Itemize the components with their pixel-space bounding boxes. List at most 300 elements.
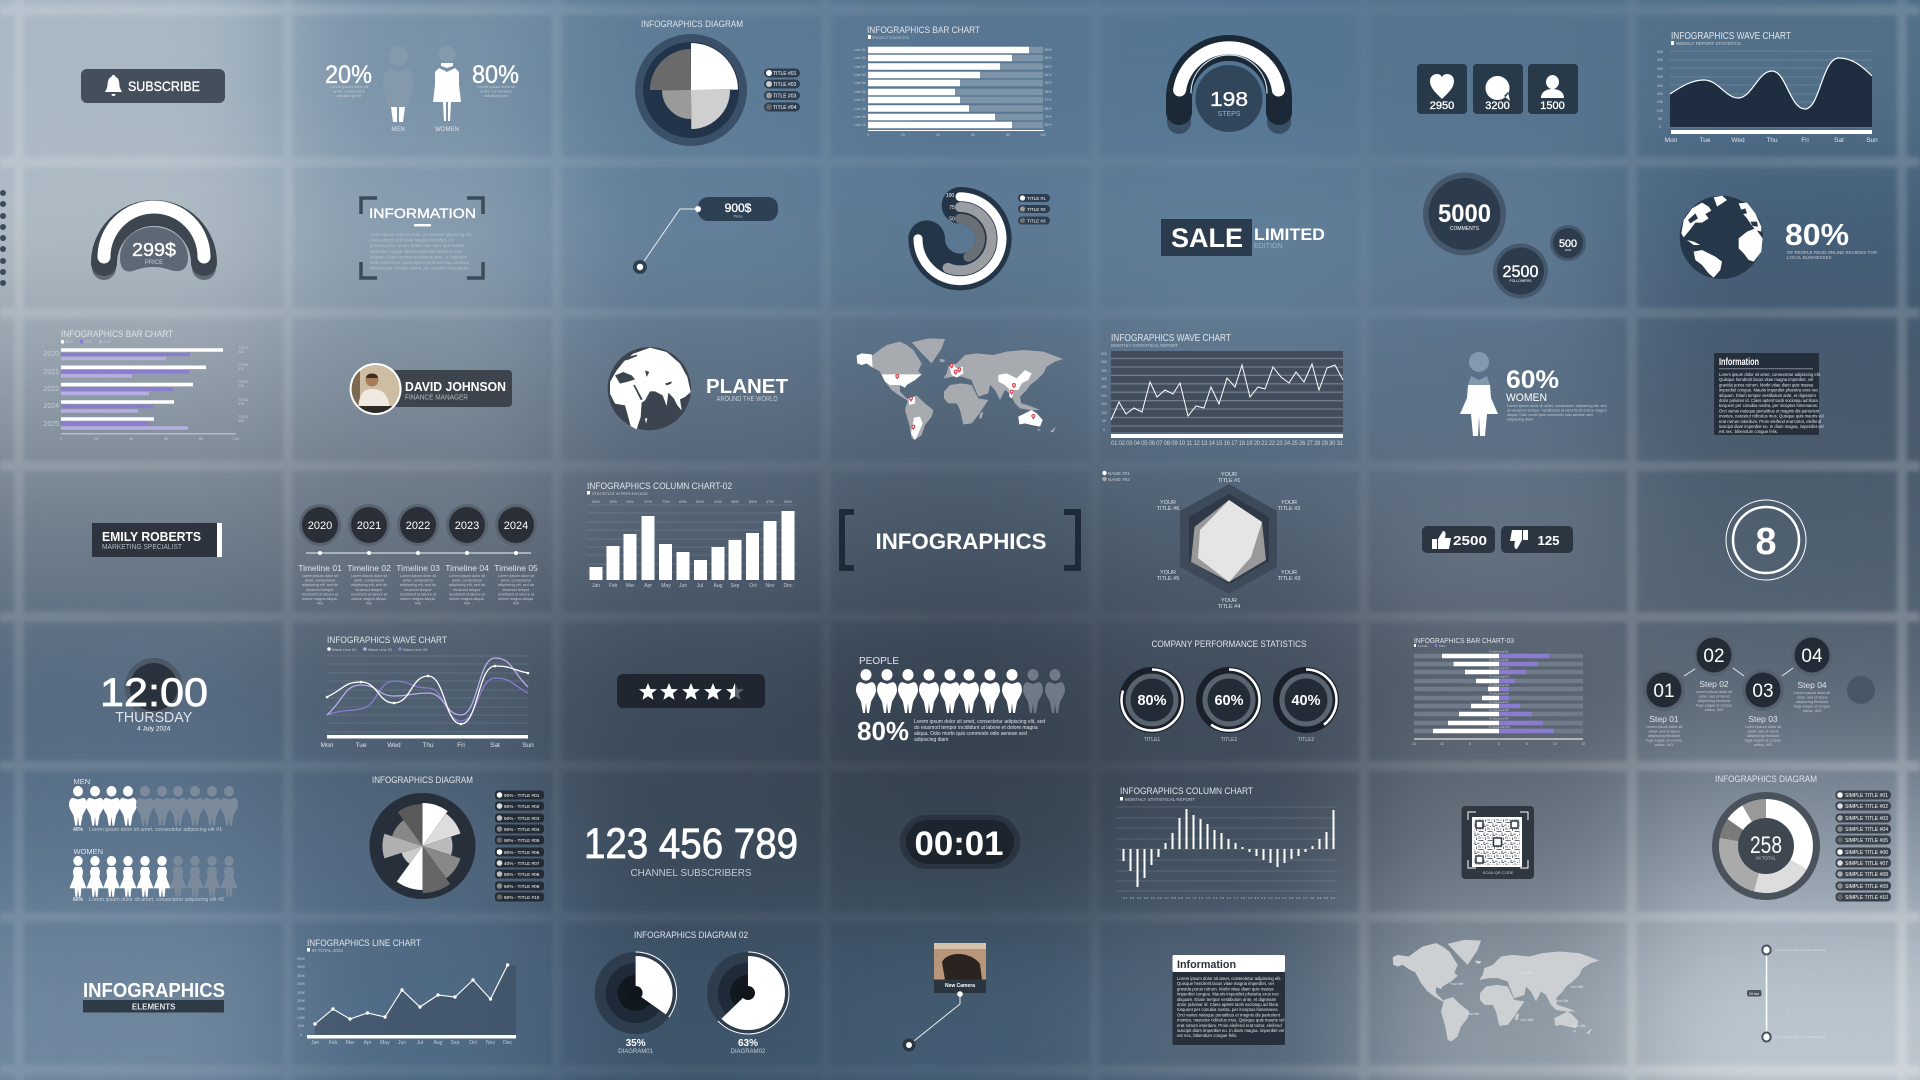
subtitle: MONTHLY STATISTICAL REPORT — [1111, 343, 1178, 348]
region labels: Your title — [1520, 1018, 1534, 1022]
value labels: 35K — [1657, 67, 1664, 71]
panel: column chart 02 — [587, 481, 797, 589]
scale labels: 100 — [946, 193, 954, 199]
axis ticks: 01 02 03 04 05 06 07 08 09 10 11 12 13 14 15 16 17 18 19 20 21 22 23 24 25 26 27 28 29 30 31 — [1123, 896, 1335, 900]
heading: INFORMATION — [369, 205, 476, 221]
value labels: 200 — [1101, 394, 1107, 398]
day labels: Sun — [522, 742, 534, 749]
tag — [92, 523, 217, 557]
axis: 10 — [1553, 742, 1557, 746]
step circle 04 — [1791, 634, 1833, 676]
body text: erat rutrum interdum. Proin eleifend erat tortor, eleifend — [1177, 1023, 1282, 1028]
labels: DIAGRAM01 — [618, 1049, 654, 1055]
heading: INFOGRAPHICS DIAGRAM — [1715, 774, 1817, 785]
caption: aliqua. Odio morbi quis commodo odio aenean sed — [1507, 413, 1593, 417]
legend: NAME #02 — [1108, 477, 1130, 482]
value labels: 300K — [297, 982, 306, 986]
legend — [764, 68, 800, 112]
totals: TOTAL — [238, 415, 249, 419]
milestone text: #02 — [366, 602, 372, 606]
card — [1714, 353, 1819, 435]
milestone text: Lorem ipsum dolor sit — [498, 574, 535, 578]
caption: OF PEOPLE READ ONLINE REVIEWS FOR — [1787, 250, 1878, 255]
step circle 01 — [1643, 669, 1685, 711]
note under 80 percent: adipiscing elit — [484, 93, 509, 98]
axis — [1412, 738, 1585, 746]
day labels: Fri — [457, 742, 465, 749]
value labels: 250 — [1101, 385, 1107, 389]
step 03 text: adipiscing tincidunt — [1747, 734, 1780, 738]
panel: timeline — [298, 504, 538, 606]
globe — [1680, 196, 1763, 279]
legend — [1102, 471, 1130, 482]
panel: emily roberts name tag — [92, 523, 222, 557]
panel: price gauge 299 — [104, 207, 204, 272]
inner ring — [1733, 507, 1799, 573]
step circle 02 — [1693, 634, 1735, 676]
scale labels — [946, 193, 955, 222]
step 04 text: adhuc, #04 — [1803, 709, 1821, 713]
body text: montes, nascetur ridiculus mus. Quisque quis mauris vel — [1177, 1018, 1285, 1023]
axis labels: TITLE #6 — [1157, 506, 1179, 512]
name: DAVID JOHNSON — [405, 379, 506, 394]
body text: suscipit diam imperdiet eu. In diam magna, imperdiet vel — [1177, 1028, 1284, 1033]
step 02 text: amet, sed ut lacus — [1699, 694, 1730, 698]
series two — [327, 658, 528, 715]
month labels: Dec — [503, 1040, 513, 1046]
corner markers — [1476, 821, 1518, 863]
labels: men, women: WOMEN — [435, 127, 459, 133]
totals: 37K — [238, 402, 245, 406]
value labels: 300 — [1101, 377, 1107, 381]
value labels: 100 — [1101, 411, 1107, 415]
heading: COMPANY PERFORMANCE STATISTICS — [1152, 639, 1306, 650]
labels: men, women: MEN — [391, 127, 405, 133]
region labels: Your title — [1555, 999, 1569, 1003]
subtitle: STATISTICS IN PERCENTAGE — [592, 491, 648, 496]
value labels: 25K — [1657, 84, 1664, 88]
month labels — [592, 583, 793, 589]
axis and labels: 54% — [1044, 73, 1052, 77]
value labels: 250K — [297, 991, 306, 995]
step 02 text: adipiscing tincidunt — [1698, 699, 1731, 703]
corner brackets — [361, 198, 483, 278]
underline — [414, 224, 431, 226]
panel: clock — [100, 658, 208, 732]
axis and labels: 0 — [867, 133, 869, 137]
axis: 40 — [129, 436, 134, 441]
faded circle — [1847, 676, 1875, 704]
percent labels: 47% — [644, 499, 652, 504]
subtitle: IN TOTAL 2023 — [312, 948, 343, 953]
month labels: Feb — [609, 583, 618, 589]
month labels: Jun — [679, 583, 687, 589]
month labels: Apr — [364, 1040, 372, 1046]
milestone titles: Timeline 03 — [396, 563, 440, 573]
legend — [1018, 194, 1050, 224]
body: imperdiet congue. Mauris imperdiet pharetra eros nec — [1719, 388, 1818, 393]
start note: Lorem ipsum dolor sit amet adipiscing — [1775, 948, 1826, 952]
caption: adipiscing diam — [914, 737, 948, 743]
caption: do eiusmod tempor. Vestibulum et lobortis sit dolore magna — [1507, 408, 1608, 412]
step 03 text: amet, sed ut lacus — [1748, 730, 1779, 734]
axis and labels: 36% — [1044, 90, 1052, 94]
caption: Lorem ipsum dolor sit amet, consectetur adipiscing elit, sed — [1507, 404, 1607, 408]
stat: 80 percent: 80% — [472, 61, 519, 89]
milestone text: amet, consectetur — [501, 579, 532, 583]
panel: globe 80 percent — [1680, 196, 1878, 279]
digits: 00:01 — [914, 825, 1004, 863]
panel: bipolar column chart — [1116, 786, 1337, 900]
axis labels: TITLE #3 — [1278, 576, 1300, 582]
panel: diagram 02 — [595, 930, 789, 1055]
series one — [327, 666, 528, 724]
button background — [81, 69, 225, 103]
axis and labels: Line 06 — [854, 90, 866, 94]
women figures — [70, 856, 238, 897]
value labels: 0 — [1659, 125, 1661, 129]
axis labels — [1157, 472, 1300, 610]
panel: follower bubbles — [1423, 172, 1586, 298]
day labels: Mon — [321, 742, 334, 749]
year labels: 2025 — [43, 421, 59, 428]
step 01 text: Lorem ipsum dolor sit — [1646, 725, 1683, 729]
region labels: Your title — [1570, 985, 1584, 989]
axis: 0 — [1498, 742, 1500, 746]
legend: SIMPLE TITLE #09 — [1845, 884, 1888, 890]
grid — [1670, 51, 1872, 127]
value labels — [1101, 352, 1107, 432]
legend: SIMPLE TITLE #05 — [1845, 838, 1888, 844]
body text: Lorem ipsum dolor sit amet, consectetur adipiscing elit. — [370, 232, 472, 237]
gauge value arc — [1180, 48, 1278, 90]
percent labels: 43% — [714, 499, 722, 504]
map — [1393, 940, 1599, 1041]
year labels: 2021 — [43, 369, 59, 376]
bubble: comments: COMMENTS — [1450, 226, 1480, 232]
axis: 5 — [1526, 742, 1528, 746]
note under 80 percent: amet, consectetur — [480, 88, 513, 94]
pill — [900, 815, 1020, 869]
bar values — [868, 50, 1029, 125]
bubble: comments: 5000 — [1438, 200, 1491, 228]
milestone text: amet, consectetur — [305, 579, 336, 583]
legend: SIMPLE TITLE #04 — [1845, 827, 1888, 833]
row captions: Professional #10 — [1489, 725, 1510, 729]
axis and labels: 40 — [936, 133, 940, 137]
like card: 2500 — [1453, 533, 1487, 548]
milestone text: amet, consectetur — [354, 579, 385, 583]
percent labels: 63% — [679, 499, 687, 504]
gauge 60: 60% — [1214, 692, 1244, 709]
connector — [640, 209, 698, 267]
day labels: Wed — [387, 742, 401, 749]
axis and labels: 63% — [1044, 65, 1052, 69]
dislike card — [1501, 526, 1573, 553]
axis: 15 — [1412, 742, 1416, 746]
legend: 2022 — [103, 340, 111, 344]
legend: 80% - TITLE #04 — [504, 827, 540, 832]
legend: SIMPLE TITLE #01 — [1845, 793, 1888, 799]
note under 20 percent: amet, consectetur — [333, 88, 366, 94]
row captions: Professional #5 — [1489, 683, 1509, 687]
axis and labels: Line 09 — [854, 115, 866, 119]
donut: 258 — [1750, 832, 1782, 859]
percent labels: 47% — [766, 499, 774, 504]
month labels: Jun — [398, 1040, 406, 1046]
axis — [60, 433, 240, 441]
line — [1766, 950, 1767, 1037]
heading: INFOGRAPHICS COLUMN CHART-02 — [587, 481, 732, 492]
card — [1462, 806, 1534, 879]
axis labels: YOUR — [1221, 472, 1237, 478]
heading: PEOPLE — [859, 656, 899, 667]
white arc — [918, 197, 1002, 281]
stars — [639, 683, 744, 700]
body text: gravida purus rutrum. Morbi vitae diam quis massa — [1177, 986, 1274, 991]
gauge titles: TITLE2 — [1298, 737, 1314, 743]
milestone text: amet, consectetur — [403, 579, 434, 583]
card: followers: 1500 — [1540, 100, 1565, 112]
value labels: 30K — [1657, 75, 1664, 79]
heading: INFOGRAPHICS BAR CHART — [61, 329, 173, 340]
legend: 2021 — [84, 340, 92, 344]
axis and labels: 80 — [1006, 133, 1010, 137]
milestone text: incididunt ut labore et — [498, 592, 535, 596]
panel: infographics elements title — [83, 980, 225, 1012]
month labels: Mar — [626, 583, 635, 589]
row captions — [1489, 650, 1510, 729]
heading: INFOGRAPHICS BAR CHART-03 — [1414, 636, 1514, 645]
legend: SIMPLE TITLE #02 — [1845, 804, 1888, 810]
milestone text: eiusmod tempor — [502, 588, 530, 592]
pie 63 percent — [707, 952, 789, 1034]
step 03 text — [1745, 714, 1782, 747]
labels: 63% — [738, 1038, 758, 1049]
milestone titles: Timeline 01 — [298, 563, 342, 573]
legend: 40% - TITLE #07 — [504, 861, 540, 866]
panel: camera map pin — [902, 943, 986, 1052]
photo — [934, 943, 986, 980]
labels: 35% — [626, 1038, 646, 1049]
bubble: likes: 500 — [1559, 238, 1577, 250]
body text: aliquam. Etiam tempor vestibulum ante, et dignissim — [370, 254, 467, 259]
panel: social counters — [1417, 64, 1578, 114]
legend — [1414, 644, 1446, 648]
axis and labels: 58% — [1044, 107, 1052, 111]
row captions: Professional #4 — [1489, 674, 1509, 678]
dark grey arc — [940, 219, 980, 259]
step 02 text — [1696, 679, 1733, 712]
bar tracks — [868, 50, 1043, 125]
heading: INFOGRAPHICS DIAGRAM 02 — [634, 930, 748, 941]
body text: Class aptent taciti dolor magna imperdiet, vel — [370, 238, 454, 243]
step circle 02: 02 — [1703, 646, 1725, 667]
axis labels: YOUR — [1221, 598, 1237, 604]
line — [315, 965, 508, 1024]
value labels: 200K — [297, 999, 306, 1003]
gauge 40: 40% — [1292, 692, 1320, 709]
dislike card: 125 — [1538, 533, 1560, 548]
month labels: Jan — [592, 583, 600, 589]
axis labels: Wed — [1731, 137, 1745, 144]
legend: TITLE #01 — [773, 71, 797, 77]
milestone text: incididunt ut labore et — [400, 592, 437, 596]
stat: 20 percent: 20% — [325, 61, 372, 89]
axis and labels: 82% — [1044, 56, 1052, 60]
legend: SIMPLE TITLE #07 — [1845, 861, 1888, 867]
donut: IN TOTAL — [1756, 856, 1776, 860]
columns — [590, 511, 794, 580]
legend: 60% - TITLE #09 — [504, 884, 540, 889]
legend: TITLE #02 — [773, 82, 797, 88]
limited word: LIMITED — [1254, 225, 1325, 244]
axis and labels: Line 04 — [854, 73, 866, 77]
step 04 text: Lorem ipsum dolor sit — [1794, 691, 1831, 695]
month labels — [311, 1040, 513, 1046]
axis and labels — [854, 48, 1052, 137]
note under 80 percent: Lorem ipsum dolor sit — [477, 84, 516, 89]
value labels: 350K — [297, 974, 306, 978]
axis labels: TITLE #2 — [1278, 506, 1300, 512]
body text: gravida purus rutrum. Morbi vitae dolor quis massa — [370, 243, 465, 248]
label: subscribe: SUBSCRIBE — [128, 78, 200, 94]
value labels: 15K — [1657, 100, 1664, 104]
panel: process steps — [1643, 634, 1875, 747]
body: torquent per conubia nostra, per inceptos himenaeos. — [1719, 403, 1818, 408]
gauge dark arc — [104, 213, 204, 263]
gauge housing — [92, 255, 116, 268]
end note: Lorem ipsum dolor sit amet adipiscing — [1775, 1035, 1826, 1039]
icon: man figure — [383, 46, 413, 122]
axis: 100 — [233, 436, 240, 441]
bar — [617, 674, 765, 708]
value labels: 150 — [1101, 402, 1107, 406]
axis and labels: 100 — [1040, 133, 1046, 137]
time: 12:00 — [100, 671, 208, 715]
year labels — [43, 351, 59, 428]
white bars — [61, 350, 223, 419]
unit: Price — [733, 214, 743, 218]
body text: est nec, bibendum congue felis. — [1177, 1033, 1237, 1038]
legend — [61, 340, 111, 344]
region labels: Your title — [1450, 982, 1464, 986]
bubble: followers: 2500 — [1502, 262, 1538, 281]
percent labels: 35% — [592, 499, 600, 504]
body card — [1172, 972, 1285, 1045]
month labels: Dec — [784, 583, 793, 589]
milestone text: Lorem ipsum dolor sit — [351, 574, 388, 578]
wave line — [1670, 58, 1872, 109]
region labels: Your title — [1466, 1012, 1480, 1016]
base bar — [327, 735, 528, 738]
plot bands — [1111, 351, 1343, 432]
milestone titles: Timeline 02 — [347, 563, 391, 573]
purple bars — [61, 354, 190, 424]
totals: 32K — [238, 384, 245, 388]
value labels — [297, 957, 306, 1037]
day labels: Thu — [422, 742, 434, 749]
totals: 37K — [238, 367, 245, 371]
panel: donut diagram 258 — [1712, 774, 1891, 902]
panel: line chart — [297, 938, 516, 1046]
grid — [327, 656, 528, 732]
legend: Male — [1439, 644, 1446, 648]
legend: 80% - TITLE #06 — [504, 850, 540, 855]
legend: SIMPLE TITLE #03 — [1845, 816, 1888, 822]
series one — [1198, 500, 1262, 582]
connector — [909, 993, 960, 1045]
step 02 text: adhuc, #02 — [1705, 708, 1723, 712]
subtitle: AROUND THE WORLD — [716, 396, 778, 403]
pie chart — [635, 34, 747, 146]
axis and labels: Line 10 — [854, 123, 866, 127]
value labels: 150K — [297, 1007, 306, 1011]
panel: world map with pins — [857, 338, 1063, 440]
gauge 80: 80% — [1138, 692, 1166, 709]
percent labels: 15% — [609, 499, 617, 504]
sale word: SALE — [1171, 223, 1243, 253]
heading: Information — [1719, 357, 1759, 368]
step 01 text — [1646, 714, 1683, 747]
panel: polar area diagram — [370, 775, 544, 902]
edition word: EDITION — [1254, 243, 1282, 250]
milestone text: eiusmod tempor — [453, 588, 481, 592]
donut — [1712, 792, 1820, 900]
milestone text: dolore magna aliqua. — [449, 597, 485, 601]
value labels: 100K — [297, 1016, 306, 1020]
row captions: Professional #2 — [1489, 658, 1509, 662]
axis labels: YOUR — [1281, 570, 1297, 576]
points — [313, 963, 509, 1026]
milestone text: eiusmod tempor — [306, 588, 334, 592]
bubble: comments — [1423, 172, 1506, 256]
title: INFOGRAPHICS — [876, 529, 1046, 554]
year labels: 2022 — [43, 386, 59, 393]
step 04 text: adipiscing tincidunt — [1796, 700, 1829, 704]
milestone text: Lorem ipsum dolor sit — [400, 574, 437, 578]
month labels: Aug — [434, 1040, 443, 1046]
value labels — [1657, 50, 1664, 129]
panel: three series wave chart — [321, 635, 534, 749]
gauge housing — [1167, 98, 1191, 122]
tag — [392, 370, 512, 407]
scan frame — [1468, 812, 1528, 868]
milestone text: #04 — [464, 602, 470, 606]
badge — [1161, 219, 1252, 256]
subtitle: MONTHLY STATISTICAL REPORT — [1125, 797, 1195, 802]
base bar — [1111, 434, 1343, 438]
legend: 80% - TITLE #08 — [504, 872, 540, 877]
date: 4 July 2024 — [137, 726, 171, 732]
legend: 80% - TITLE #10 — [504, 895, 540, 900]
body: aliquam. Etiam tempor vestibulum ante, et dignissim — [1719, 393, 1816, 398]
day labels: Sat — [490, 742, 500, 749]
dial — [125, 658, 183, 716]
caption: LOCAL BUSINESSES — [1787, 255, 1832, 260]
milestone text: dolore magna aliqua. — [498, 597, 534, 601]
body text: imperdiet congue. Mauris imperdiet pharetra eros — [370, 249, 461, 254]
year circles: 2022 — [406, 520, 430, 532]
bubble: likes: LIKE — [1565, 248, 1571, 252]
body: montes, nascetur ridiculus mus. Quisque quis mauris vel — [1719, 414, 1824, 419]
gauge dark arc — [1179, 48, 1279, 112]
gauge 60 — [1196, 667, 1262, 733]
line — [1111, 364, 1343, 420]
legend: SIMPLE TITLE #10 — [1845, 895, 1888, 901]
stat: 80% — [857, 716, 909, 746]
labels — [618, 1038, 766, 1055]
